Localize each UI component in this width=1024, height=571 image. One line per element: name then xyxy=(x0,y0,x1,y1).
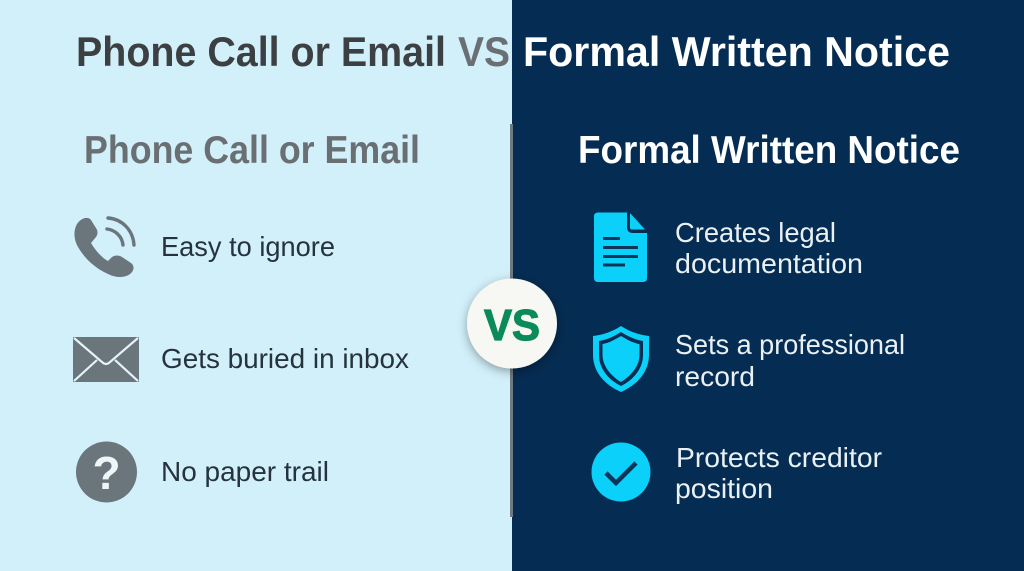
title: Formal Written Notice xyxy=(523,28,950,75)
text: creates legal documentation: Creates legal xyxy=(675,217,836,248)
text: sets a professional record xyxy=(675,329,905,392)
text: sets a professional record: record xyxy=(675,361,755,392)
title: Phone Call or Email xyxy=(76,28,446,75)
text: easy to ignore: Easy to ignore xyxy=(161,231,335,262)
text: creates legal documentation xyxy=(675,217,863,279)
icon: check circle xyxy=(592,442,650,502)
text: creates legal documentation: documentation xyxy=(675,248,863,279)
icon: shield xyxy=(593,326,649,392)
text: sets a professional record: Sets a professional xyxy=(675,329,905,360)
panel: left background xyxy=(0,0,512,571)
icon: document xyxy=(594,212,647,282)
center divider line xyxy=(510,124,513,517)
title xyxy=(76,28,950,75)
text: protects creditor position: Protects creditor xyxy=(676,442,882,473)
heading: right panel: Formal Written Notice xyxy=(578,129,960,172)
title: VS xyxy=(458,28,510,75)
icon: envelope xyxy=(73,337,139,382)
text: protects creditor position: position xyxy=(675,473,773,504)
text: gets buried in inbox: Gets buried in inbox xyxy=(161,343,409,374)
icon: question mark: ? xyxy=(92,447,121,499)
panel: right background xyxy=(512,0,1024,571)
vs badge xyxy=(467,278,557,368)
text: no paper trail: No paper trail xyxy=(161,456,329,487)
icon: question mark xyxy=(76,442,137,502)
heading: left panel: Phone Call or Email xyxy=(84,129,420,172)
vs badge: VS xyxy=(484,301,540,350)
icon: phone xyxy=(74,218,134,277)
text: protects creditor position xyxy=(675,442,882,504)
